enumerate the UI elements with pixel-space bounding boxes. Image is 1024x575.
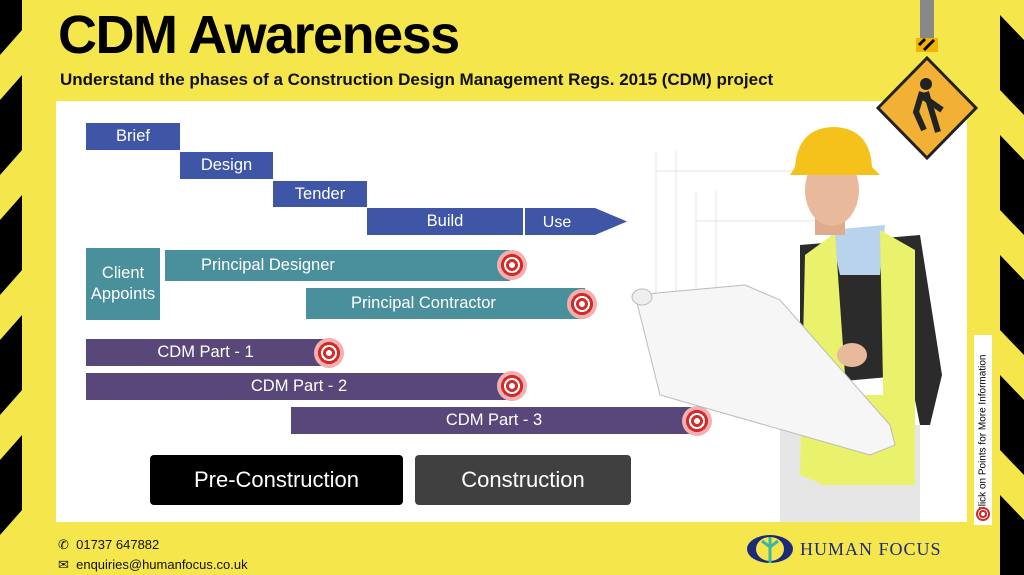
construction button: Construction (461, 467, 585, 492)
gantt: build (367, 208, 523, 235)
gantt: design (180, 152, 273, 179)
gantt: design: Design (201, 156, 252, 174)
logo: human focus (747, 535, 942, 563)
client appoints (86, 248, 160, 320)
contact: phone: ✆ 01737 647882 (58, 537, 159, 552)
pre-construction button: Pre-Construction (194, 467, 359, 492)
client appoints: Appoints (91, 285, 155, 303)
target (497, 371, 527, 401)
principal contractor: Principal Contractor (351, 294, 496, 312)
cdm part 1: CDM Part - 1 (157, 343, 254, 361)
gantt: use arrow (525, 208, 627, 235)
contact: email: ✉ enquiries@humanfocus.co.uk (58, 557, 248, 572)
target (497, 250, 527, 280)
gantt: build: Build (427, 212, 463, 230)
client appoints: Client (102, 264, 144, 282)
target (567, 289, 597, 319)
principal designer (165, 250, 510, 281)
panel: main (56, 101, 967, 522)
cdm part 1 (86, 339, 325, 366)
pre-construction button (150, 455, 403, 505)
title: CDM Awareness (58, 5, 459, 65)
gantt: brief (86, 123, 180, 150)
target (682, 406, 712, 436)
cdm part 2 (86, 373, 512, 400)
gantt: use arrow: Use (543, 214, 571, 231)
cdm part 2: CDM Part - 2 (251, 377, 347, 395)
construction button (415, 455, 631, 505)
principal designer: Principal Designer (201, 256, 335, 274)
principal contractor (306, 288, 585, 319)
gantt: brief: Brief (116, 127, 150, 145)
side note: Click on Points for More Information (978, 355, 988, 514)
background crane sketch (656, 151, 815, 381)
cdm part 3: CDM Part - 3 (446, 411, 542, 429)
gantt: tender (273, 181, 367, 207)
logo: human focus: HUMAN FOCUS (800, 539, 942, 559)
target (314, 338, 344, 368)
gantt: tender: Tender (295, 184, 345, 202)
subtitle: Understand the phases of a Construction Design Management Regs. 2015 (CDM) project (60, 70, 773, 89)
worker illustration (632, 127, 942, 522)
cdm part 3 (291, 407, 697, 434)
side note (974, 335, 992, 525)
warning sign with hook (876, 0, 978, 160)
